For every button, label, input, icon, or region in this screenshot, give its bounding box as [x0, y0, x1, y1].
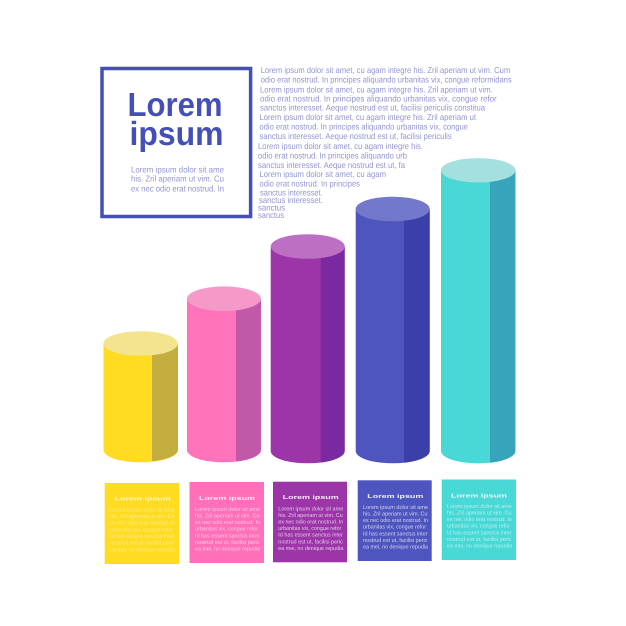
card: blue: ea mei, no denique repudia — [363, 544, 429, 551]
card: blue — [358, 480, 432, 561]
card: purple: Id has essent sanctus inter — [278, 532, 343, 539]
bar chart — [104, 158, 515, 463]
card: yellow: Lorem ipsum dolor sit ame — [110, 507, 175, 514]
card: teal: his. Zril aperiam ut vim. Cu — [447, 510, 512, 516]
teal cylinder — [441, 158, 515, 463]
card: blue: urbanitas vix, congue refor — [363, 524, 426, 531]
card: pink: nostrud est ut, facilisi peric — [195, 539, 260, 546]
card: teal: Lorem ipsum — [451, 492, 507, 499]
card: blue: nostrud est ut, facilisi peric — [363, 537, 428, 544]
card: teal: Id has essent sanctus inter — [447, 529, 512, 536]
card: teal: nostrud est ut, facilisi peric — [447, 536, 512, 543]
card: blue: ex nec odio erat nostrud. In — [363, 517, 428, 524]
yellow cylinder — [104, 331, 178, 462]
body text block: sanctus interesset. — [260, 188, 323, 198]
card: blue: his. Zril aperiam ut vim. Cu — [363, 510, 428, 518]
card: yellow — [105, 483, 179, 564]
body text block: sanctus interesset. Aeque nostrud est ut, facilisi periculis — [260, 131, 452, 141]
heading: ipsum — [130, 116, 224, 153]
card: yellow: ex nec odio erat nostrud. In — [110, 520, 175, 527]
title panel text: his. Zril aperiam ut vim. Cu — [131, 174, 224, 184]
card: teal — [442, 480, 516, 560]
body text block: Lorem ipsum dolor sit amet, cu agam integre his. Zril aperiam ut vim. Cum — [261, 65, 510, 75]
body text block: Lorem ipsum dolor sit amet, cu agam integre his. Zril aperiam ut vim. — [260, 84, 493, 94]
card: teal: Lorem ipsum dolor sit ame — [447, 503, 512, 510]
card: pink: urbanitas vix, congue refor — [195, 526, 258, 533]
card: blue: Id has essent sanctus inter — [363, 530, 428, 537]
body text block: Lorem ipsum dolor sit amet, cu agam integre his. Zril aperiam ut — [260, 112, 477, 122]
body text block: odio erat nostrud. In principes aliquando urb — [258, 150, 407, 160]
card: pink — [190, 482, 264, 563]
title panel text — [131, 164, 224, 193]
heading — [128, 87, 224, 153]
body text block — [258, 65, 512, 220]
card: teal: ex nec odio erat nostrud. In — [447, 516, 512, 523]
pink cylinder — [187, 286, 261, 462]
title panel text: Lorem ipsum dolor sit ame — [131, 164, 224, 174]
body text block: sanctus — [258, 210, 284, 220]
card: purple: urbanitas vix, congue refor — [278, 525, 341, 532]
card: pink: his. Zril aperiam ut vim. Cu — [195, 512, 260, 520]
card: teal: urbanitas vix, congue refor — [447, 523, 510, 530]
card: purple: ex nec odio erat nostrud. In — [278, 518, 343, 525]
purple cylinder — [271, 234, 345, 463]
card: purple — [273, 482, 347, 562]
card: pink: Id has essent sanctus inter — [195, 532, 260, 539]
body text block: odio erat nostrud. In principes aliquando urbanitas vix, congue — [260, 121, 468, 131]
body text block: odio erat nostrud. In principes — [260, 178, 360, 188]
blue cylinder — [356, 197, 430, 463]
card: pink: Lorem ipsum — [199, 495, 255, 502]
card: yellow: Id has essent sanctus inter — [110, 533, 175, 540]
body text block: Lorem ipsum dolor sit amet, cu agam — [260, 169, 386, 179]
card: teal: ea mei, no denique repudia — [447, 543, 513, 550]
card: purple: nostrud est ut, facilisi peric — [278, 538, 343, 545]
body text block: odio erat nostrud. In principes aliquando urbanitas vix, congue refor — [260, 93, 497, 103]
card: pink: ex nec odio erat nostrud. In — [195, 519, 260, 526]
card: purple: his. Zril aperiam ut vim. Cu — [278, 512, 343, 519]
title panel — [102, 68, 251, 216]
card: purple: Lorem ipsum dolor sit ame — [278, 505, 343, 512]
card: pink: ea mei, no denique repudia — [195, 546, 261, 553]
card: yellow: Lorem ipsum — [115, 495, 171, 502]
body text block: sanctus interesset. — [259, 195, 323, 205]
card: blue: Lorem ipsum dolor sit ame — [363, 504, 428, 511]
card: yellow: his. Zril aperiam ut vim. Cu — [110, 513, 174, 520]
title panel text: ex nec odio erat nostrud. In — [131, 183, 224, 193]
body text block: Lorem ipsum dolor sit amet, cu agam integre his. — [258, 141, 423, 151]
card: yellow: nostrud est ut, facilisi peric — [110, 540, 175, 547]
card: pink: Lorem ipsum dolor sit ame — [195, 506, 260, 513]
card: yellow: urbanitas vix, congue refor — [110, 526, 173, 533]
heading: Lorem — [128, 87, 222, 124]
body text block: sanctus interesset. Aeque nostrud est ut, fa — [258, 160, 405, 170]
body text block: sanctus interesset. Aeque nostrud est ut, facilisi periculis constitua — [260, 103, 485, 113]
card: purple: Lorem ipsum — [283, 494, 339, 501]
card: purple: ea mei, no denique repudia — [278, 545, 344, 552]
body text block: sanctus — [258, 203, 285, 213]
body text block: odio erat nostrud. In principes aliquando urbanitas vix, congue reformidans — [261, 74, 512, 84]
card: blue: Lorem ipsum — [367, 493, 423, 500]
card: yellow: ea mei, no denique repudia — [110, 546, 176, 553]
